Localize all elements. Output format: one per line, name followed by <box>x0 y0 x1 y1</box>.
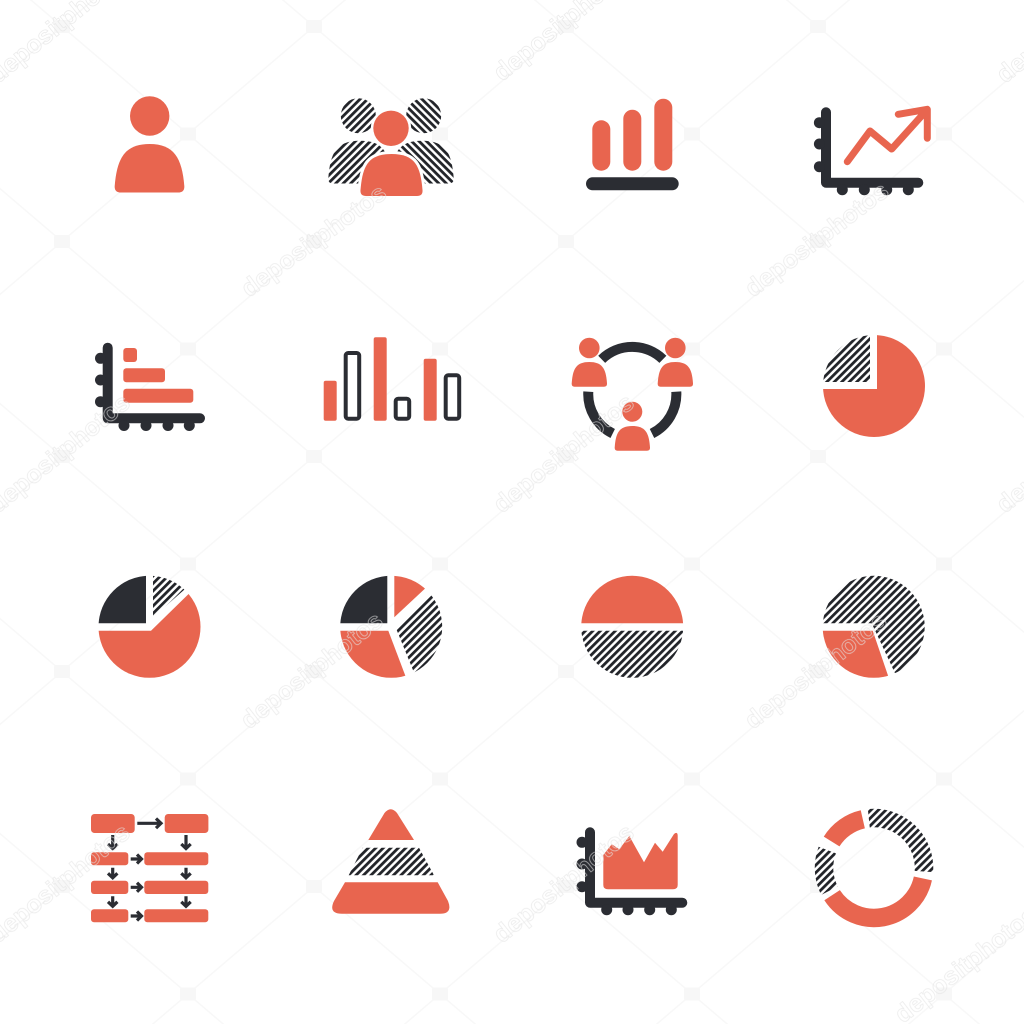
icon: network of people <box>572 338 693 451</box>
icon: hatched pie chart with red slice <box>823 576 925 678</box>
watermark text: depositphotos <box>236 179 392 303</box>
icon: donut chart <box>824 818 924 918</box>
watermark text: depositphotos <box>739 607 892 735</box>
icon: horizontal bar chart <box>95 348 200 431</box>
watermark text: depositphotos <box>488 389 640 519</box>
icon: area chart <box>576 832 682 915</box>
watermark text: depositphotos <box>235 607 388 735</box>
icon: quarter pie chart <box>823 335 925 437</box>
icon: person <box>115 96 184 192</box>
icon: four-part pie chart <box>340 576 442 678</box>
icon: flow chart <box>91 814 208 922</box>
icon: solid and outlined bars <box>324 337 459 421</box>
watermark text: depositphotos <box>488 819 640 949</box>
watermark text: depositphotos <box>740 177 894 303</box>
icon: three-part pie chart <box>98 576 200 678</box>
icon: rising line chart <box>814 109 927 195</box>
icon: layered pyramid <box>332 809 449 914</box>
icon: group of people <box>328 98 454 196</box>
icon: half split pie chart <box>581 576 683 678</box>
icon: rounded bar chart <box>586 99 679 190</box>
